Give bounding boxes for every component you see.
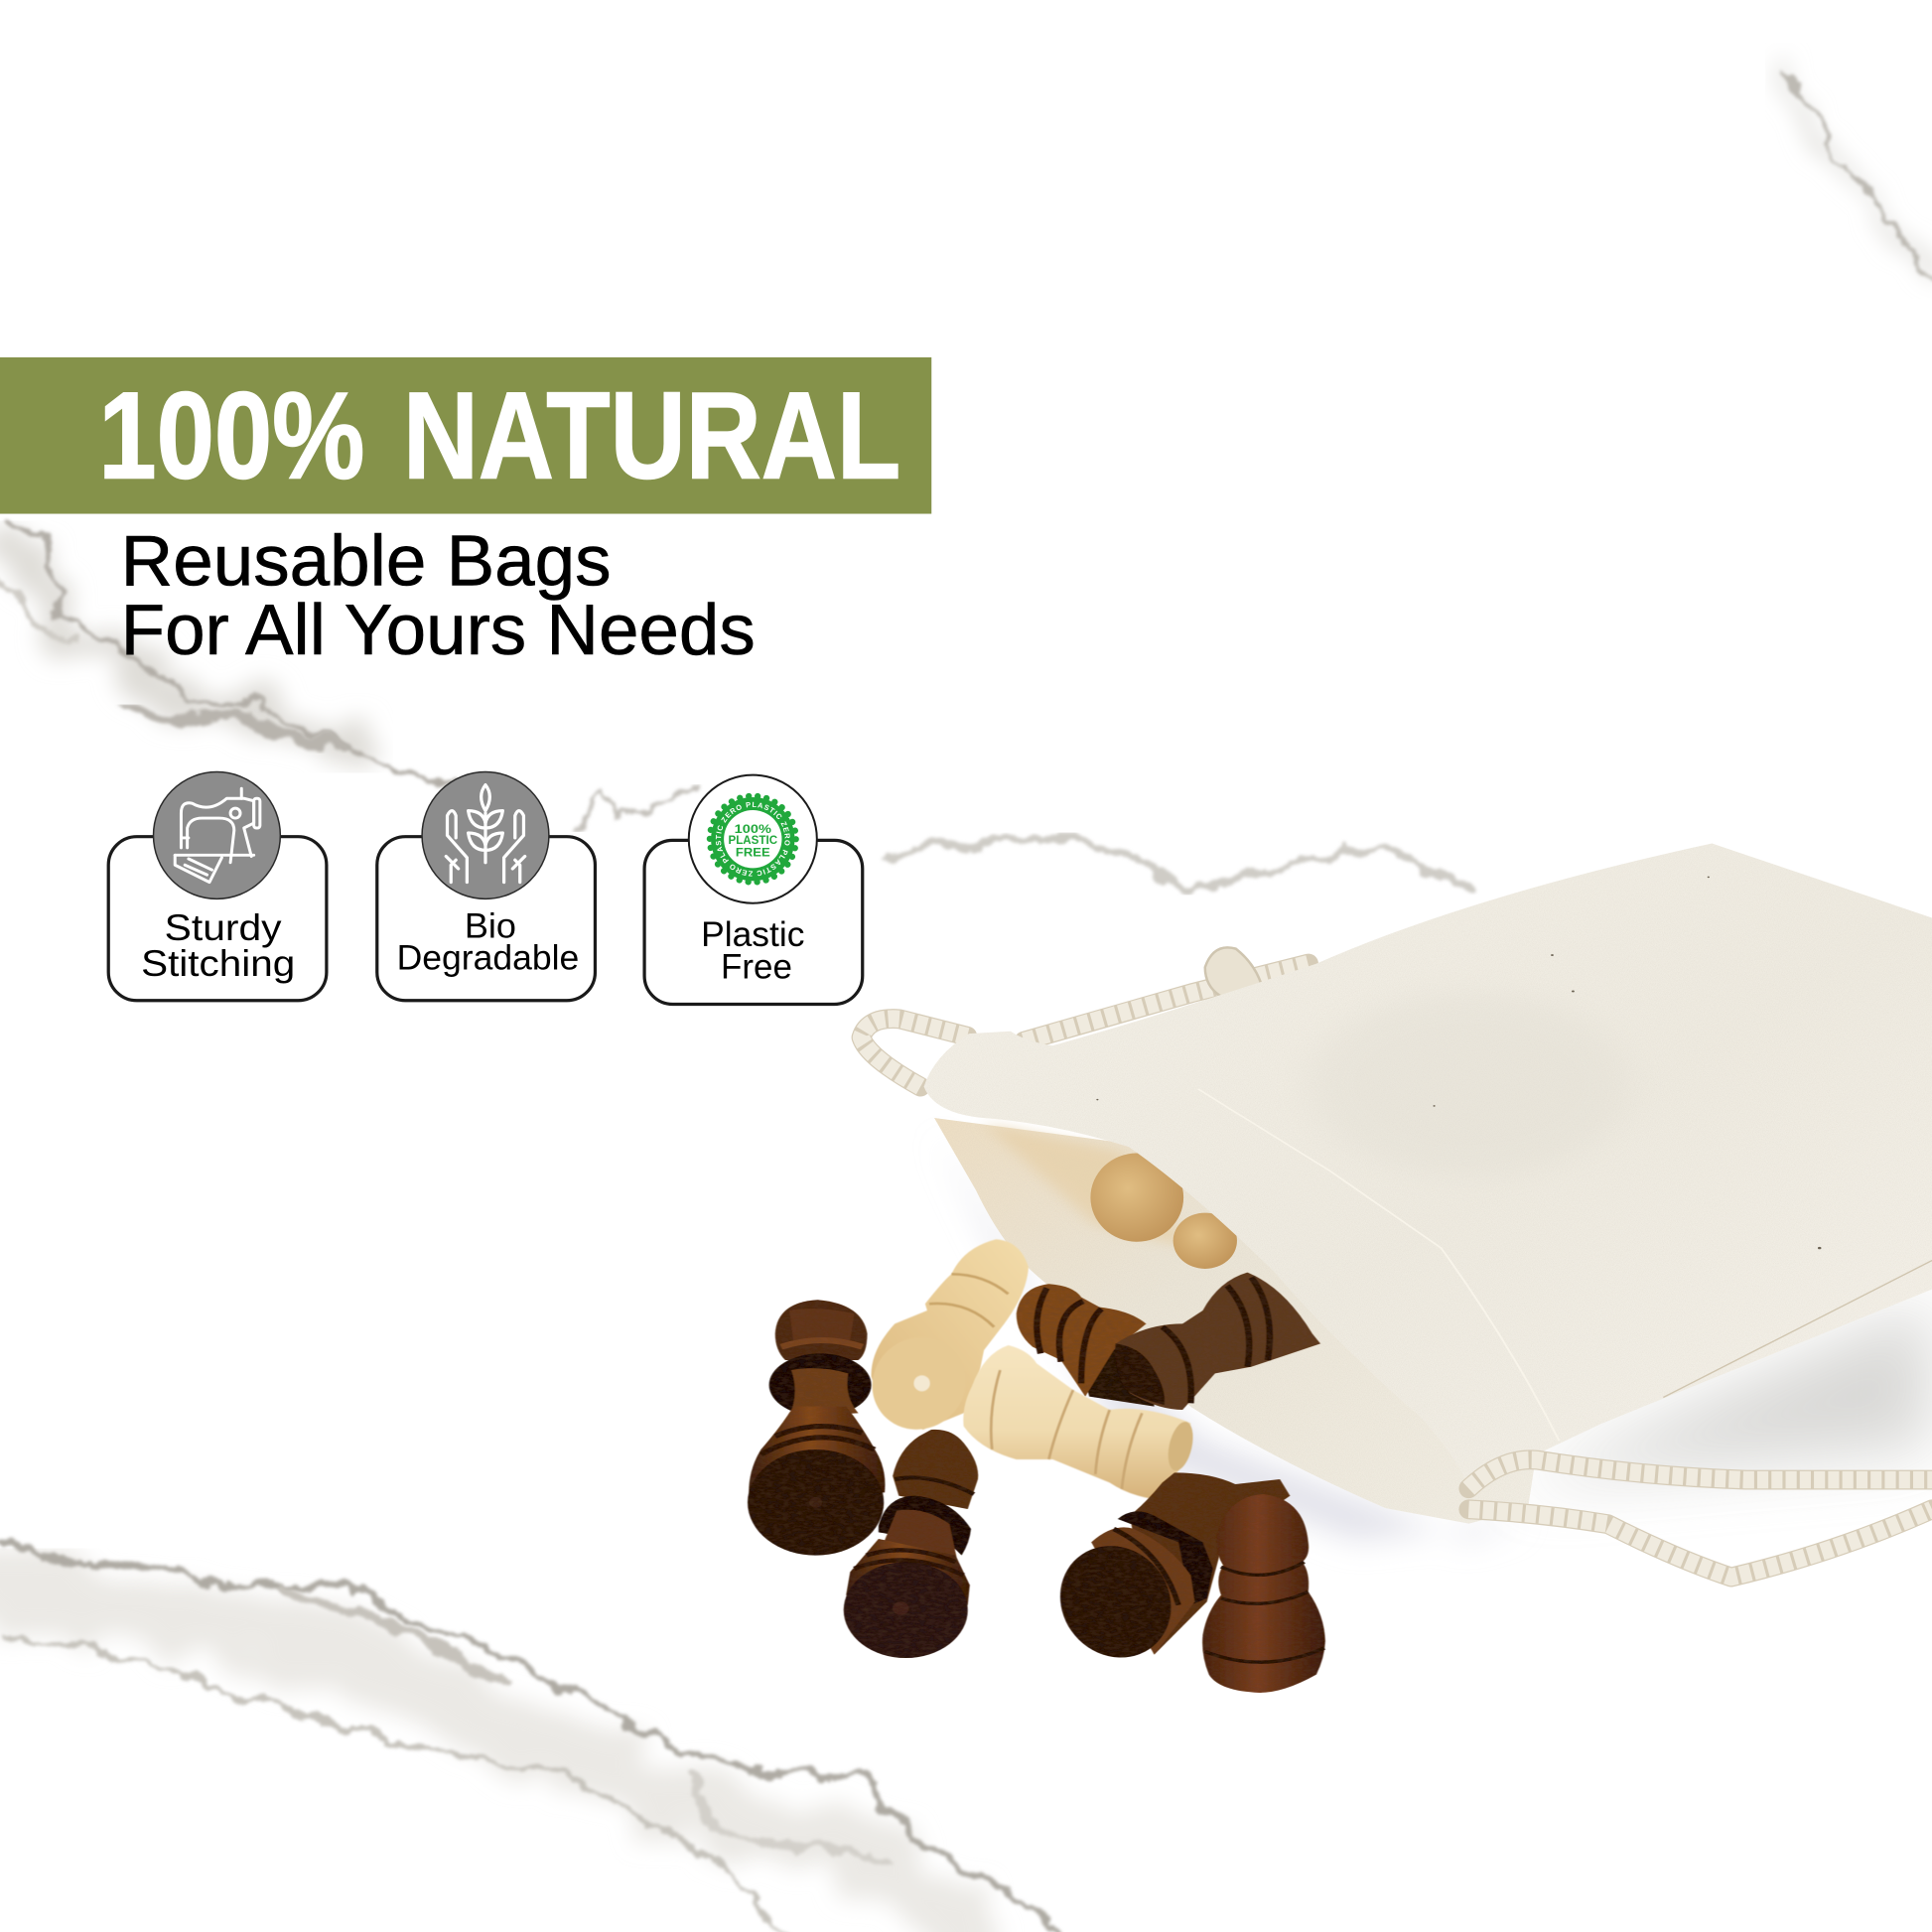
feature card: bio degradable: Degradable	[397, 940, 579, 978]
marble vein: bottom left	[0, 1543, 1059, 1932]
icon: zero plastic badge: FREE	[736, 846, 770, 860]
icon: zero plastic badge: 100%	[735, 822, 771, 836]
icon: zero plastic badge: ZERO PLASTIC ZERO PLASTIC ZERO PLASTIC	[715, 802, 790, 877]
title banner: 100%	[98, 368, 364, 505]
bag fabric shading	[1310, 993, 1628, 1175]
feature card: plastic free	[642, 774, 864, 1007]
bag front panel	[924, 843, 1932, 1486]
marble vein: top right	[1780, 65, 1932, 281]
piece: light rook	[963, 1345, 1197, 1499]
small pieces inside bag	[1090, 1153, 1237, 1269]
feature card: sturdy stitching: Sturdy	[165, 906, 282, 948]
subtitle: Reusable Bags	[121, 522, 612, 602]
title banner	[0, 357, 931, 514]
feature card: bio degradable: Bio	[465, 907, 516, 945]
piece: light bishop	[865, 1239, 1029, 1435]
icon: sewing machine	[154, 772, 280, 898]
feature card: plastic free: Free	[721, 948, 792, 986]
bag speckles	[1096, 877, 1821, 1249]
upper drawstring rope	[862, 947, 1309, 1087]
piece: dark rook left	[748, 1300, 885, 1556]
feature card: bio degradable	[377, 772, 595, 1001]
cotton drawstring bag	[924, 843, 1932, 1524]
piece: dark rook behind	[1017, 1284, 1155, 1407]
bag seams	[1198, 1089, 1932, 1441]
title banner: NATURAL	[403, 368, 900, 505]
lower drawstring rope	[1468, 1459, 1932, 1578]
subtitle	[121, 522, 756, 670]
feature card: sturdy stitching	[108, 772, 327, 1001]
bag interior	[934, 1118, 1538, 1524]
piece: dark knight	[1047, 1472, 1290, 1666]
marble vein: left to centre	[0, 517, 1472, 890]
chess pieces	[748, 1239, 1325, 1693]
feature card: sturdy stitching: Stitching	[141, 942, 295, 984]
piece: dark bishop	[844, 1430, 978, 1658]
icon: zero plastic badge: PLASTIC	[728, 833, 777, 847]
rope knot	[1205, 947, 1264, 1000]
feature card: plastic free: Plastic	[701, 916, 804, 954]
subtitle: For All Yours Needs	[121, 591, 756, 670]
piece: dark pawn	[1202, 1494, 1325, 1693]
bag interior shading	[983, 1123, 1191, 1248]
bag shadow	[936, 1134, 1932, 1540]
icon: hands holding plant	[422, 772, 549, 898]
icon: zero plastic badge	[687, 774, 818, 904]
piece: dark rook at bag mouth	[1115, 1273, 1320, 1410]
